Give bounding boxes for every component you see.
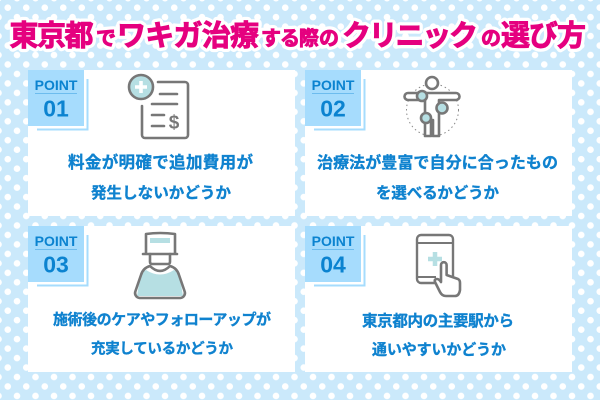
badge: point 04 [305, 226, 364, 286]
title: 東京都 [10, 12, 94, 54]
title: で [96, 22, 116, 51]
title: の [319, 22, 339, 51]
title: 選び方 [501, 12, 586, 54]
title: の [481, 22, 501, 51]
title: の [481, 22, 501, 51]
text: point 01 [68, 149, 254, 203]
badge: point 03: POINT [35, 233, 78, 249]
text: point 03 [53, 308, 271, 358]
badge: point 02 [305, 70, 364, 130]
badge: point 01: 01 [43, 96, 69, 122]
title: 東京都 [10, 12, 94, 54]
icon: body with joints [405, 77, 460, 136]
title: 選び方 [501, 12, 586, 54]
panel: point 02 [305, 70, 572, 216]
badge: point 02: POINT [312, 77, 355, 93]
text: point 01: 料金が明確で追加費用が [68, 149, 254, 173]
title: ワキガ治療 [117, 12, 259, 54]
badge: point 01: POINT [35, 77, 78, 93]
badge: point 01 [28, 70, 88, 130]
panel: point 01 [28, 70, 295, 216]
icon: invoice with medical cross [129, 75, 188, 138]
badge: point 04: POINT [312, 233, 355, 249]
title: クリニック [342, 12, 478, 54]
title: する際 [261, 22, 319, 51]
icon: smartphone with tapping hand [417, 235, 460, 296]
text: point 04: 通いやすいかどうか [372, 338, 506, 360]
title: する際 [261, 22, 319, 51]
text: point 03: 充実しているかどうか [91, 338, 234, 358]
badge: point 04: 04 [320, 252, 346, 278]
badge: point 03 [28, 226, 88, 286]
text: point 02: 治療法が豊富で自分に合ったもの [317, 149, 558, 173]
title: ワキガ治療 [117, 12, 259, 54]
icon: invoice with medical cross: $ [169, 112, 180, 134]
text: point 01: 発生しないかどうか [91, 181, 231, 203]
panel: point 03 [28, 226, 295, 372]
title: で [96, 22, 116, 51]
badge: point 02: 02 [320, 96, 346, 122]
text: point 02 [317, 149, 558, 203]
text: point 04 [362, 309, 514, 360]
badge: point 03: 03 [43, 252, 69, 278]
title [10, 12, 586, 54]
text: point 03: 施術後のケアやフォローアップが [53, 308, 271, 330]
icon: masked doctor [135, 233, 185, 298]
panel: point 04 [305, 226, 572, 372]
text: point 04: 東京都内の主要駅から [362, 309, 514, 331]
title: クリニック [342, 12, 478, 54]
title: の [319, 22, 339, 51]
text: point 02: を選べるかどうか [376, 181, 499, 203]
